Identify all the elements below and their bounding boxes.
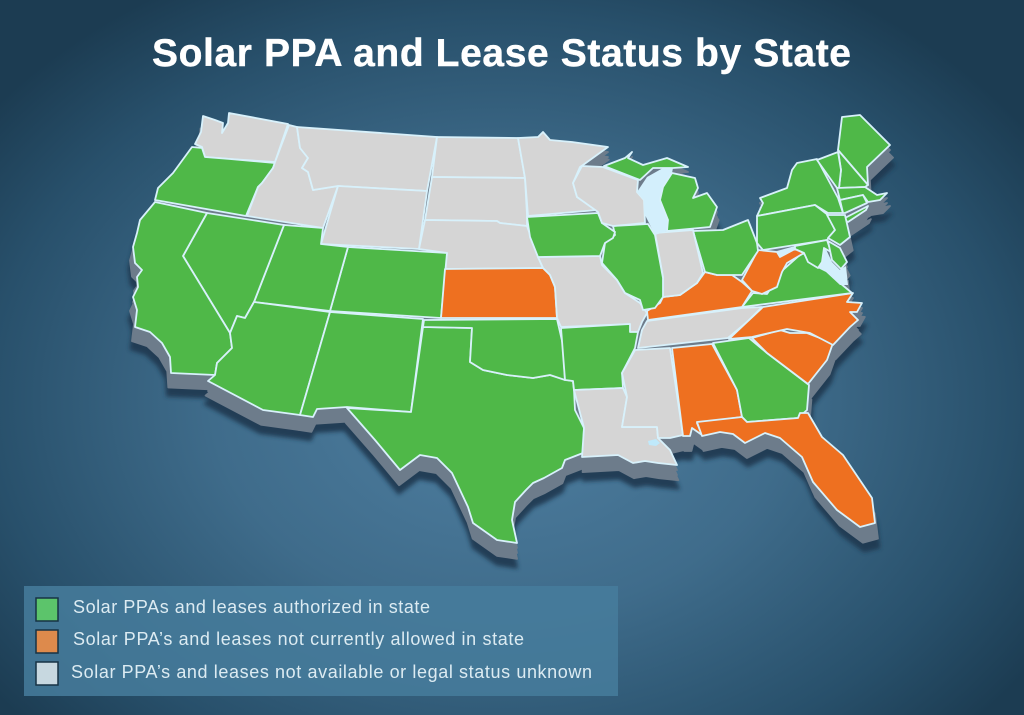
Lake Pontchartrain — [648, 439, 660, 446]
map drop shadow — [128, 133, 895, 568]
Texas — [347, 327, 584, 543]
Indiana — [655, 230, 703, 297]
Washington — [195, 113, 288, 162]
Vermont — [817, 152, 841, 188]
New Jersey — [827, 215, 850, 245]
Alabama — [672, 344, 742, 436]
Colorado — [330, 247, 447, 318]
Massachusetts — [837, 187, 887, 202]
Delaware and eastern shore — [828, 241, 847, 269]
Iowa — [527, 213, 615, 257]
title: Solar PPA and Lease Status by State — [152, 32, 851, 75]
Montana — [297, 127, 437, 191]
Utah — [254, 225, 348, 311]
South Carolina — [752, 330, 833, 384]
legend item: not allowed: Solar PPA’s and leases not currently allowed in state — [73, 629, 524, 649]
New Mexico — [300, 312, 423, 417]
US state map — [133, 113, 890, 543]
Kentucky — [647, 272, 752, 320]
Florida — [697, 413, 875, 527]
Kansas — [441, 268, 557, 318]
Michigan upper peninsula — [604, 152, 688, 180]
Tennessee — [638, 307, 762, 348]
New York — [757, 159, 843, 216]
Ohio — [693, 220, 758, 275]
Oregon — [155, 147, 275, 216]
Illinois — [602, 224, 663, 310]
map extrusion — [130, 118, 893, 559]
Missouri — [538, 256, 647, 332]
Oklahoma — [423, 319, 565, 380]
Arkansas — [561, 324, 638, 390]
Lake Michigan — [637, 168, 673, 235]
New Hampshire — [838, 150, 868, 188]
Louisiana — [574, 388, 677, 465]
California — [133, 202, 232, 375]
Arizona — [208, 302, 330, 415]
Chesapeake water — [777, 246, 795, 257]
Wisconsin — [573, 166, 645, 226]
Nebraska — [419, 220, 543, 269]
Connecticut and Rhode Island — [840, 195, 867, 213]
Wyoming — [321, 186, 427, 249]
Minnesota — [518, 132, 608, 216]
Mississippi — [622, 348, 683, 438]
legend item: authorized: Solar PPAs and leases authorized in state — [73, 597, 430, 617]
Pennsylvania — [757, 205, 835, 250]
Maryland — [795, 240, 831, 268]
North Carolina — [729, 293, 862, 345]
North Dakota — [432, 137, 525, 178]
Long Island — [843, 206, 868, 222]
Chesapeake Bay — [818, 245, 848, 285]
Maine — [838, 115, 890, 185]
Georgia — [713, 338, 809, 422]
Nevada — [183, 213, 284, 333]
South Dakota — [425, 177, 527, 226]
legend panel — [24, 586, 618, 696]
Michigan lower peninsula — [660, 173, 717, 231]
legend item: unknown: Solar PPA’s and leases not available or legal status unknown — [71, 662, 592, 682]
West Virginia — [742, 249, 804, 294]
Virginia — [742, 253, 852, 307]
Idaho — [247, 125, 338, 228]
